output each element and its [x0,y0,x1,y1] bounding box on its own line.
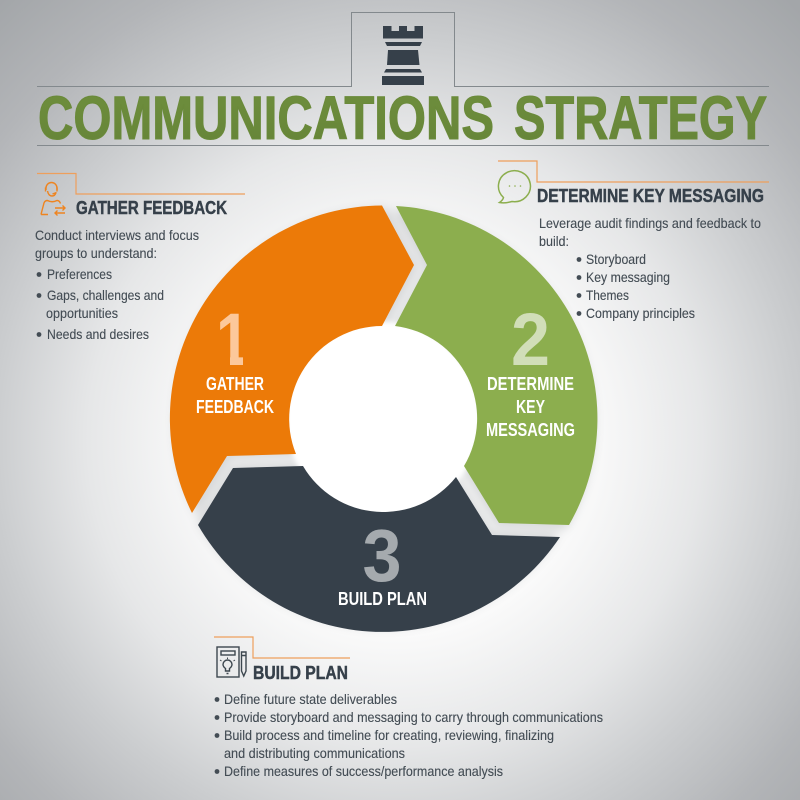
text: gather feedback intro: groups to understand: [35,245,157,261]
list: build plan: Define measures of success/performance analysis [224,763,503,779]
text: gather feedback intro [35,227,199,261]
segment 3: build plan: BUILD PLAN [338,589,427,609]
segment 1: gather feedback: GATHER [206,374,264,394]
list: determine key messaging: Storyboard [586,251,646,267]
segment 3: build plan: 3 [362,514,402,597]
segment 1: gather feedback [170,206,414,513]
heading: build plan: BUILD PLAN [253,663,348,683]
title: COMMUNICATIONS [38,84,494,152]
center circle [286,322,480,516]
header frame and rules [37,12,769,146]
cycle diagram [170,206,597,632]
segment 1: gather feedback: 1 [216,298,250,381]
segment 2: determine key messaging: KEY [516,397,545,417]
list: gather feedback: Gaps, challenges and [47,287,164,303]
list: gather feedback: Needs and desires [47,326,149,342]
panel: build plan [214,637,603,779]
segment 3: build plan [198,466,560,632]
connector rule: gather feedback [37,174,245,194]
list: build plan: Provide storyboard and messaging to carry through communications [224,709,603,725]
list: build plan [215,691,603,779]
icon: chat bubble [498,171,530,203]
segment 1: gather feedback: FEEDBACK [196,397,274,417]
panel: determine key messaging [498,161,769,321]
list: build plan: Build process and timeline for creating, reviewing, finalizing [224,727,554,743]
connector rule: determine key messaging [498,161,769,182]
connector rule: build plan [214,637,350,658]
heading: gather feedback: GATHER FEEDBACK [76,198,227,218]
list: build plan: and distributing communications [224,745,405,761]
heading: determine key messaging: DETERMINE KEY MESSAGING [537,186,764,206]
text: determine key messaging intro: Leverage audit findings and feedback to [539,215,761,231]
text: determine key messaging intro [539,215,761,249]
list: build plan: Define future state deliverables [224,691,397,707]
list: gather feedback [37,266,164,342]
segment 2: determine key messaging [395,206,597,525]
segment 2: determine key messaging: MESSAGING [486,420,575,440]
segment 2: determine key messaging: 2 [511,298,550,381]
icon: plan with lightbulb and pencil [217,647,246,677]
icon: rook [382,26,424,85]
icon: headset person [41,183,65,216]
list: gather feedback: Preferences [47,266,112,282]
text: determine key messaging intro: build: [539,233,569,249]
panel: gather feedback [35,174,245,342]
list: determine key messaging: Company principles [586,305,695,321]
list: determine key messaging: Key messaging [586,269,670,285]
ring shadow [175,208,594,628]
segment 2: determine key messaging: DETERMINE [487,374,574,394]
text: gather feedback intro: Conduct interviews and focus [35,227,199,243]
list: determine key messaging [577,251,695,321]
list: determine key messaging: Themes [586,287,629,303]
list: gather feedback: opportunities [46,305,118,321]
